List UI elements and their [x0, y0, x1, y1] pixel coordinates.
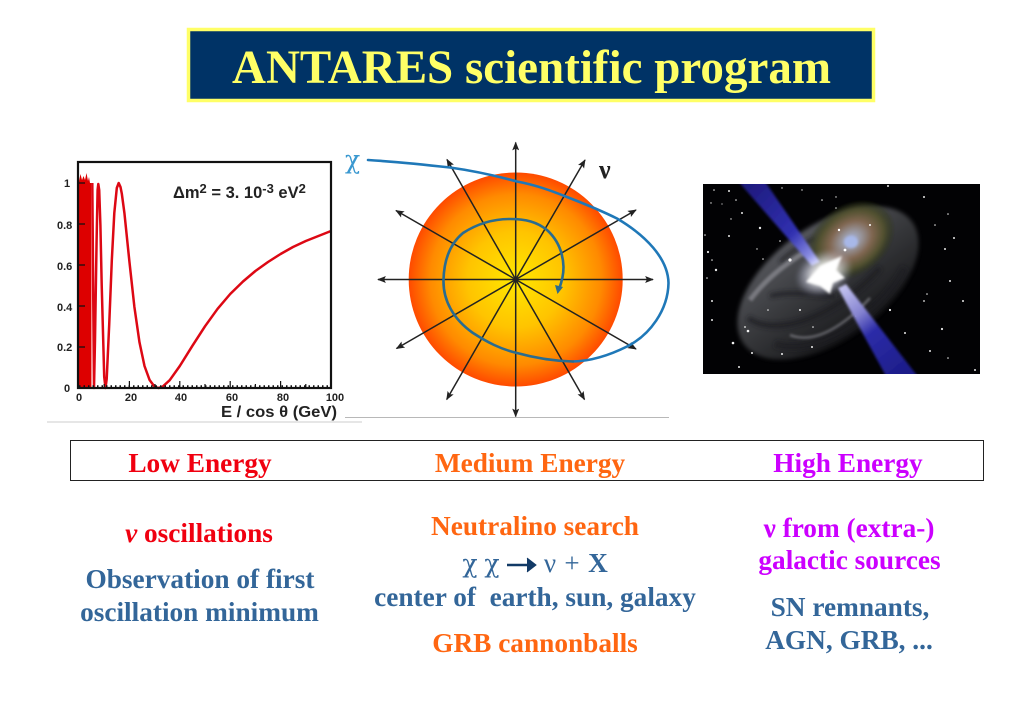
- mass-splitting annotation: 2: [299, 181, 306, 196]
- swirl in upper disc: [809, 201, 894, 277]
- plot frame and ticks: [78, 162, 331, 388]
- sources list: AGN, GRB, ...: [765, 625, 933, 655]
- column: low energy: [80, 518, 319, 627]
- disc stars: [732, 258, 891, 355]
- y axis labels: 0: [64, 383, 70, 395]
- reaction formula: X: [588, 548, 608, 578]
- reaction formula: +: [564, 548, 580, 578]
- x axis labels: 80: [277, 392, 289, 404]
- reaction formula: χ: [484, 549, 500, 578]
- mass-splitting annotation: Δm: [173, 184, 200, 202]
- disc dark lanes: [746, 236, 880, 348]
- reaction formula: χ: [462, 549, 478, 578]
- description: oscillation minimum: [80, 597, 319, 627]
- x axis title: E / cos θ (GeV): [221, 404, 337, 421]
- y axis labels: 0.4: [57, 302, 73, 314]
- sun disc: [409, 172, 623, 386]
- energy band header: [70, 440, 984, 480]
- bright central burst: [796, 250, 852, 296]
- title banner: [188, 30, 874, 100]
- y axis labels: 0.2: [57, 342, 72, 354]
- reaction formula: ν: [544, 548, 556, 578]
- diagram: neutralino capture in the sun: [345, 142, 668, 416]
- x axis labels: 60: [226, 392, 238, 404]
- chart: oscillation probability versus energy: [57, 162, 344, 421]
- blue jets: [737, 180, 919, 378]
- x axis labels: [76, 392, 344, 404]
- mass-splitting annotation: eV: [274, 184, 299, 202]
- y axis labels: 0.6: [57, 261, 72, 273]
- location text: center of earth, sun, galaxy: [374, 582, 696, 612]
- medium energy label: Medium Energy: [435, 448, 626, 478]
- heading: [758, 513, 941, 575]
- image: gamma-ray burst with jets and disc: [703, 184, 980, 374]
- mass-splitting annotation: = 3. 10: [207, 184, 262, 202]
- heading: ν oscillations: [125, 518, 273, 548]
- x axis labels: 100: [326, 392, 344, 404]
- sources list: SN remnants,: [771, 592, 929, 622]
- chi label: χ: [345, 145, 360, 174]
- low energy label: Low Energy: [128, 448, 272, 478]
- y axis labels: 1: [64, 178, 70, 190]
- neutrino radial arrows: [378, 142, 653, 416]
- description: [80, 564, 319, 627]
- nu label: ν: [598, 155, 611, 184]
- x axis labels: 40: [175, 392, 187, 404]
- GRB text: GRB cannonballs: [432, 628, 638, 658]
- column: high energy: [758, 513, 941, 655]
- neutralino spiral trajectory: [368, 160, 668, 362]
- chart underline: [47, 421, 362, 423]
- x axis labels: 0: [76, 392, 82, 404]
- y axis labels: 0.8: [57, 220, 72, 232]
- starfield: [704, 185, 976, 371]
- sources list: [765, 592, 933, 655]
- mass-splitting annotation: 2: [200, 181, 207, 196]
- heading: galactic sources: [758, 545, 941, 575]
- column: medium energy: [374, 511, 696, 658]
- description: Observation of first: [86, 564, 314, 594]
- mass-splitting annotation: -3: [262, 181, 274, 196]
- diagram underline: [345, 416, 669, 418]
- heading: ν from (extra-): [763, 513, 934, 543]
- x axis labels: 20: [125, 392, 137, 404]
- high energy label: High Energy: [773, 448, 923, 478]
- accretion disc: [732, 204, 920, 361]
- y axis labels: [57, 178, 73, 395]
- disc highlights: [750, 252, 870, 338]
- oscillation curve: [79, 173, 331, 388]
- reaction formula: [462, 548, 608, 578]
- title banner: ANTARES scientific program: [232, 41, 831, 94]
- heading: Neutralino search: [431, 511, 639, 541]
